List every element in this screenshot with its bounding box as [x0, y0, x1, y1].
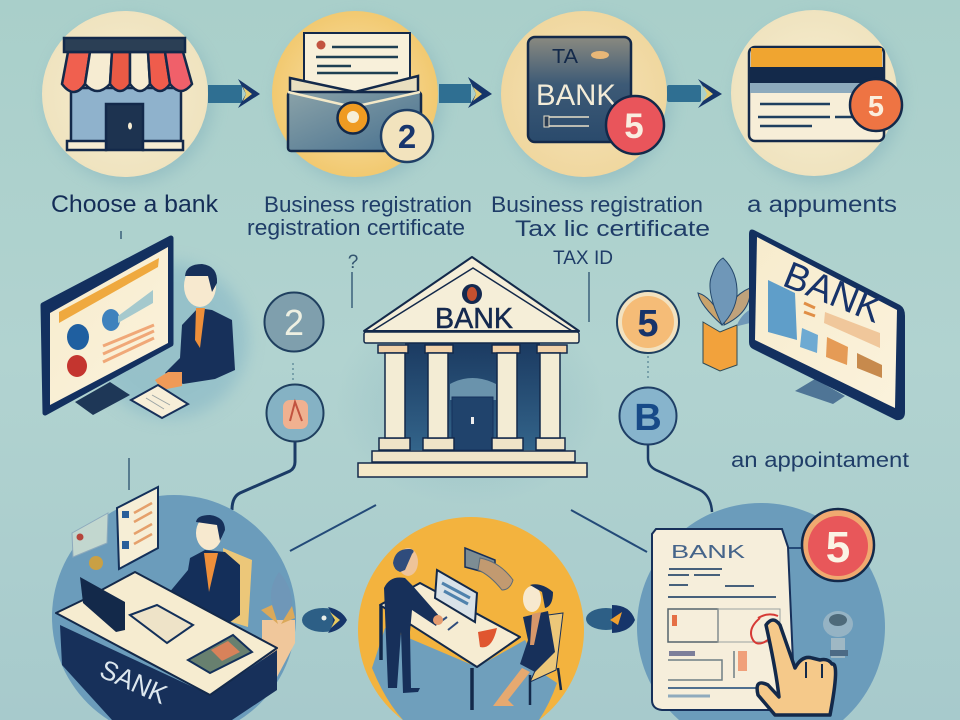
icon: bank monitor — [749, 230, 905, 420]
text: appointments: a appuments — [747, 191, 897, 217]
arrow: step 3 to 4 — [667, 79, 722, 108]
text: business registration tax id — [491, 192, 710, 269]
icon: tax card: BANK — [536, 79, 616, 112]
icon: monitor stand — [75, 382, 130, 415]
icon: red items — [478, 628, 497, 647]
text: appointment caption: an appointament — [731, 449, 909, 472]
panel: step 4 appointment card — [731, 10, 902, 182]
panel: central bank building — [335, 257, 605, 505]
icon: emblem — [462, 284, 482, 304]
text: question mark: ? — [348, 252, 358, 273]
icon: column bases — [379, 438, 565, 450]
icon: monitor stand — [795, 379, 845, 404]
icon: document: BANK — [671, 542, 745, 562]
panel: step 3 tax bank card — [501, 11, 672, 183]
badge: 5 red — [606, 96, 664, 154]
icon: plant and monitor panel — [698, 230, 905, 420]
icon: faded robot — [823, 611, 853, 658]
text: business registration certificate: Business registration — [264, 192, 472, 217]
icon: person — [155, 264, 235, 390]
icon: rear screen — [465, 548, 495, 575]
icon: columns — [385, 353, 560, 438]
arrow: desk to meeting — [302, 607, 347, 633]
connector: badge 2 to B — [292, 363, 294, 383]
icon: plant — [261, 572, 295, 677]
icon: tax card — [528, 37, 631, 142]
connector: left badge to desk — [232, 442, 295, 510]
icon: person at desk — [154, 515, 252, 628]
icon: desk monitor — [80, 577, 125, 632]
badge: step 5 orange — [617, 291, 679, 353]
arrow: step 1 to 2 — [208, 79, 260, 108]
text: business registration certificate — [247, 192, 472, 240]
badge: 5 orange — [850, 79, 902, 131]
icon: plant — [698, 258, 758, 371]
icon: seated person — [493, 584, 563, 706]
badge: step 2 grey: 2 — [284, 302, 304, 343]
connector marks — [121, 231, 589, 490]
badge: step 2 grey — [264, 292, 324, 352]
connector: badge 5 to B — [647, 356, 649, 380]
icon: laptop — [435, 570, 477, 630]
panel: step 1 choose a bank storefront — [42, 11, 213, 183]
icon: standing person — [384, 548, 443, 693]
connector: centre to desk — [290, 505, 376, 551]
panel: consultation meeting — [358, 517, 584, 720]
badge: B: B — [634, 397, 662, 439]
heading: choose a bank: Choose a bank — [51, 191, 219, 218]
icon: envelope — [288, 76, 421, 151]
badge: 5 orange: 5 — [868, 91, 884, 123]
icon: certificate — [304, 33, 410, 93]
arrow: meeting to document — [586, 605, 635, 633]
arrow: step 2 to 3 — [439, 77, 492, 108]
panel: step 2 registration envelope — [272, 11, 443, 183]
icon: chip — [478, 558, 513, 590]
icon: badge 5 — [802, 509, 874, 581]
text: business registration certificate: registration certificate — [247, 215, 465, 240]
icon: bank monitor: BANK — [778, 254, 888, 332]
icon: storefront — [62, 38, 192, 150]
icon: pointing hand — [757, 620, 836, 715]
icon: steps — [358, 451, 587, 477]
heading: bank sign: BANK — [435, 303, 514, 335]
icon: badge 5: 5 — [826, 523, 850, 572]
icon: bank interior — [405, 342, 540, 450]
icon: certificates on wall — [72, 487, 158, 570]
panel: bank desk meeting — [52, 487, 296, 720]
badge: 5 red: 5 — [624, 107, 644, 146]
text: business registration tax id: TAX ID — [553, 248, 613, 269]
icon: document — [652, 529, 795, 710]
region: blue floor — [372, 628, 557, 720]
icon: seal — [338, 102, 368, 134]
badge: 2: 2 — [398, 118, 416, 155]
text: business registration tax id: Business registration — [491, 192, 703, 217]
badge: document icon — [266, 384, 324, 442]
panel: online research monitor and person — [43, 238, 248, 418]
text: business registration tax id: Tax lic certificate — [515, 216, 710, 241]
connector: right badge to document — [648, 445, 712, 512]
icon: bank card — [749, 47, 884, 141]
badge: B — [620, 388, 676, 444]
icon: clipboard — [131, 385, 188, 418]
icon: column capitals — [378, 345, 567, 353]
text: desk sign: SANK — [96, 654, 172, 710]
connector: to 5 badge — [780, 547, 812, 549]
icon: pediment — [364, 257, 579, 343]
icon: desk — [56, 572, 277, 720]
icon: monitor — [43, 238, 171, 413]
panel: signed document — [637, 503, 885, 720]
connector: centre to document — [571, 510, 647, 552]
badge: step 5 orange: 5 — [637, 303, 659, 345]
badge: 2 — [381, 110, 433, 162]
icon: tax card: TA — [552, 46, 579, 68]
icon: meeting table — [380, 583, 520, 710]
